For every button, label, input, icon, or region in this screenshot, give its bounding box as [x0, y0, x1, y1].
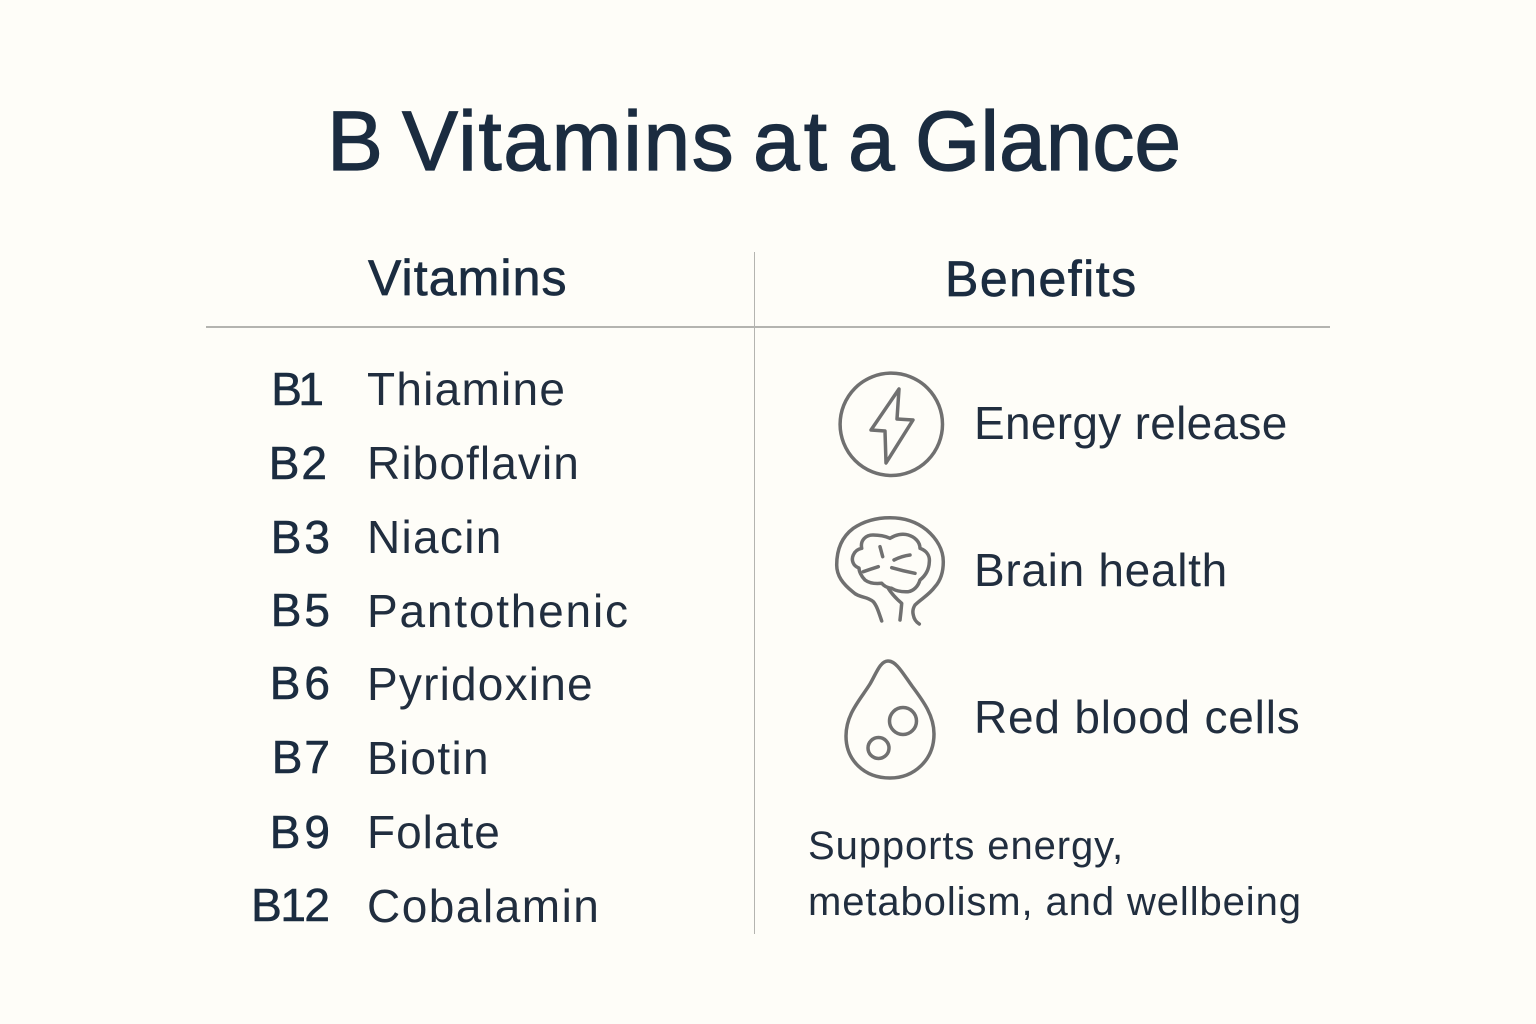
B9 code: B9: [270, 806, 334, 858]
B5 name: Pantothenic: [367, 585, 630, 637]
panel: vitamins list: [251, 363, 630, 932]
B6 name: Pyridoxine: [367, 658, 594, 710]
B9 name: Folate: [367, 806, 501, 858]
icon: blood drop with cells: [844, 659, 936, 780]
title: Vitamins: [402, 94, 735, 188]
heading: vitamins: Vitamins: [368, 250, 568, 306]
B2 code: B2: [269, 437, 329, 489]
B7 code: B7: [272, 731, 332, 783]
title: B: [327, 94, 381, 188]
B3 name: Niacin: [367, 511, 503, 563]
B3 code: B3: [271, 511, 333, 563]
B7 name: Biotin: [367, 732, 490, 784]
icon: lightning bolt in circle: [838, 371, 944, 478]
title: [327, 94, 1181, 188]
B12 name: Cobalamin: [367, 880, 600, 932]
title: Glance: [915, 94, 1181, 188]
B2 name: Riboflavin: [367, 437, 580, 489]
B5 code: B5: [271, 584, 333, 636]
B6 code: B6: [270, 657, 334, 709]
text: supporting summary: metabolism, and wellbeing: [808, 880, 1302, 924]
text: brain health: Brain health: [974, 544, 1228, 596]
title: a: [848, 94, 895, 188]
B1 code: B1: [271, 363, 320, 415]
text: red blood cells: Red blood cells: [974, 691, 1301, 743]
heading: benefits: Benefits: [945, 251, 1138, 307]
text: supporting summary: Supports energy,: [808, 824, 1124, 868]
text: energy release: Energy release: [974, 397, 1288, 449]
text: supporting summary: [808, 824, 1302, 924]
icon: brain in head: [834, 516, 946, 626]
title: at: [753, 94, 831, 188]
B1 name: Thiamine: [367, 363, 566, 415]
B12 code: B12: [251, 879, 328, 931]
